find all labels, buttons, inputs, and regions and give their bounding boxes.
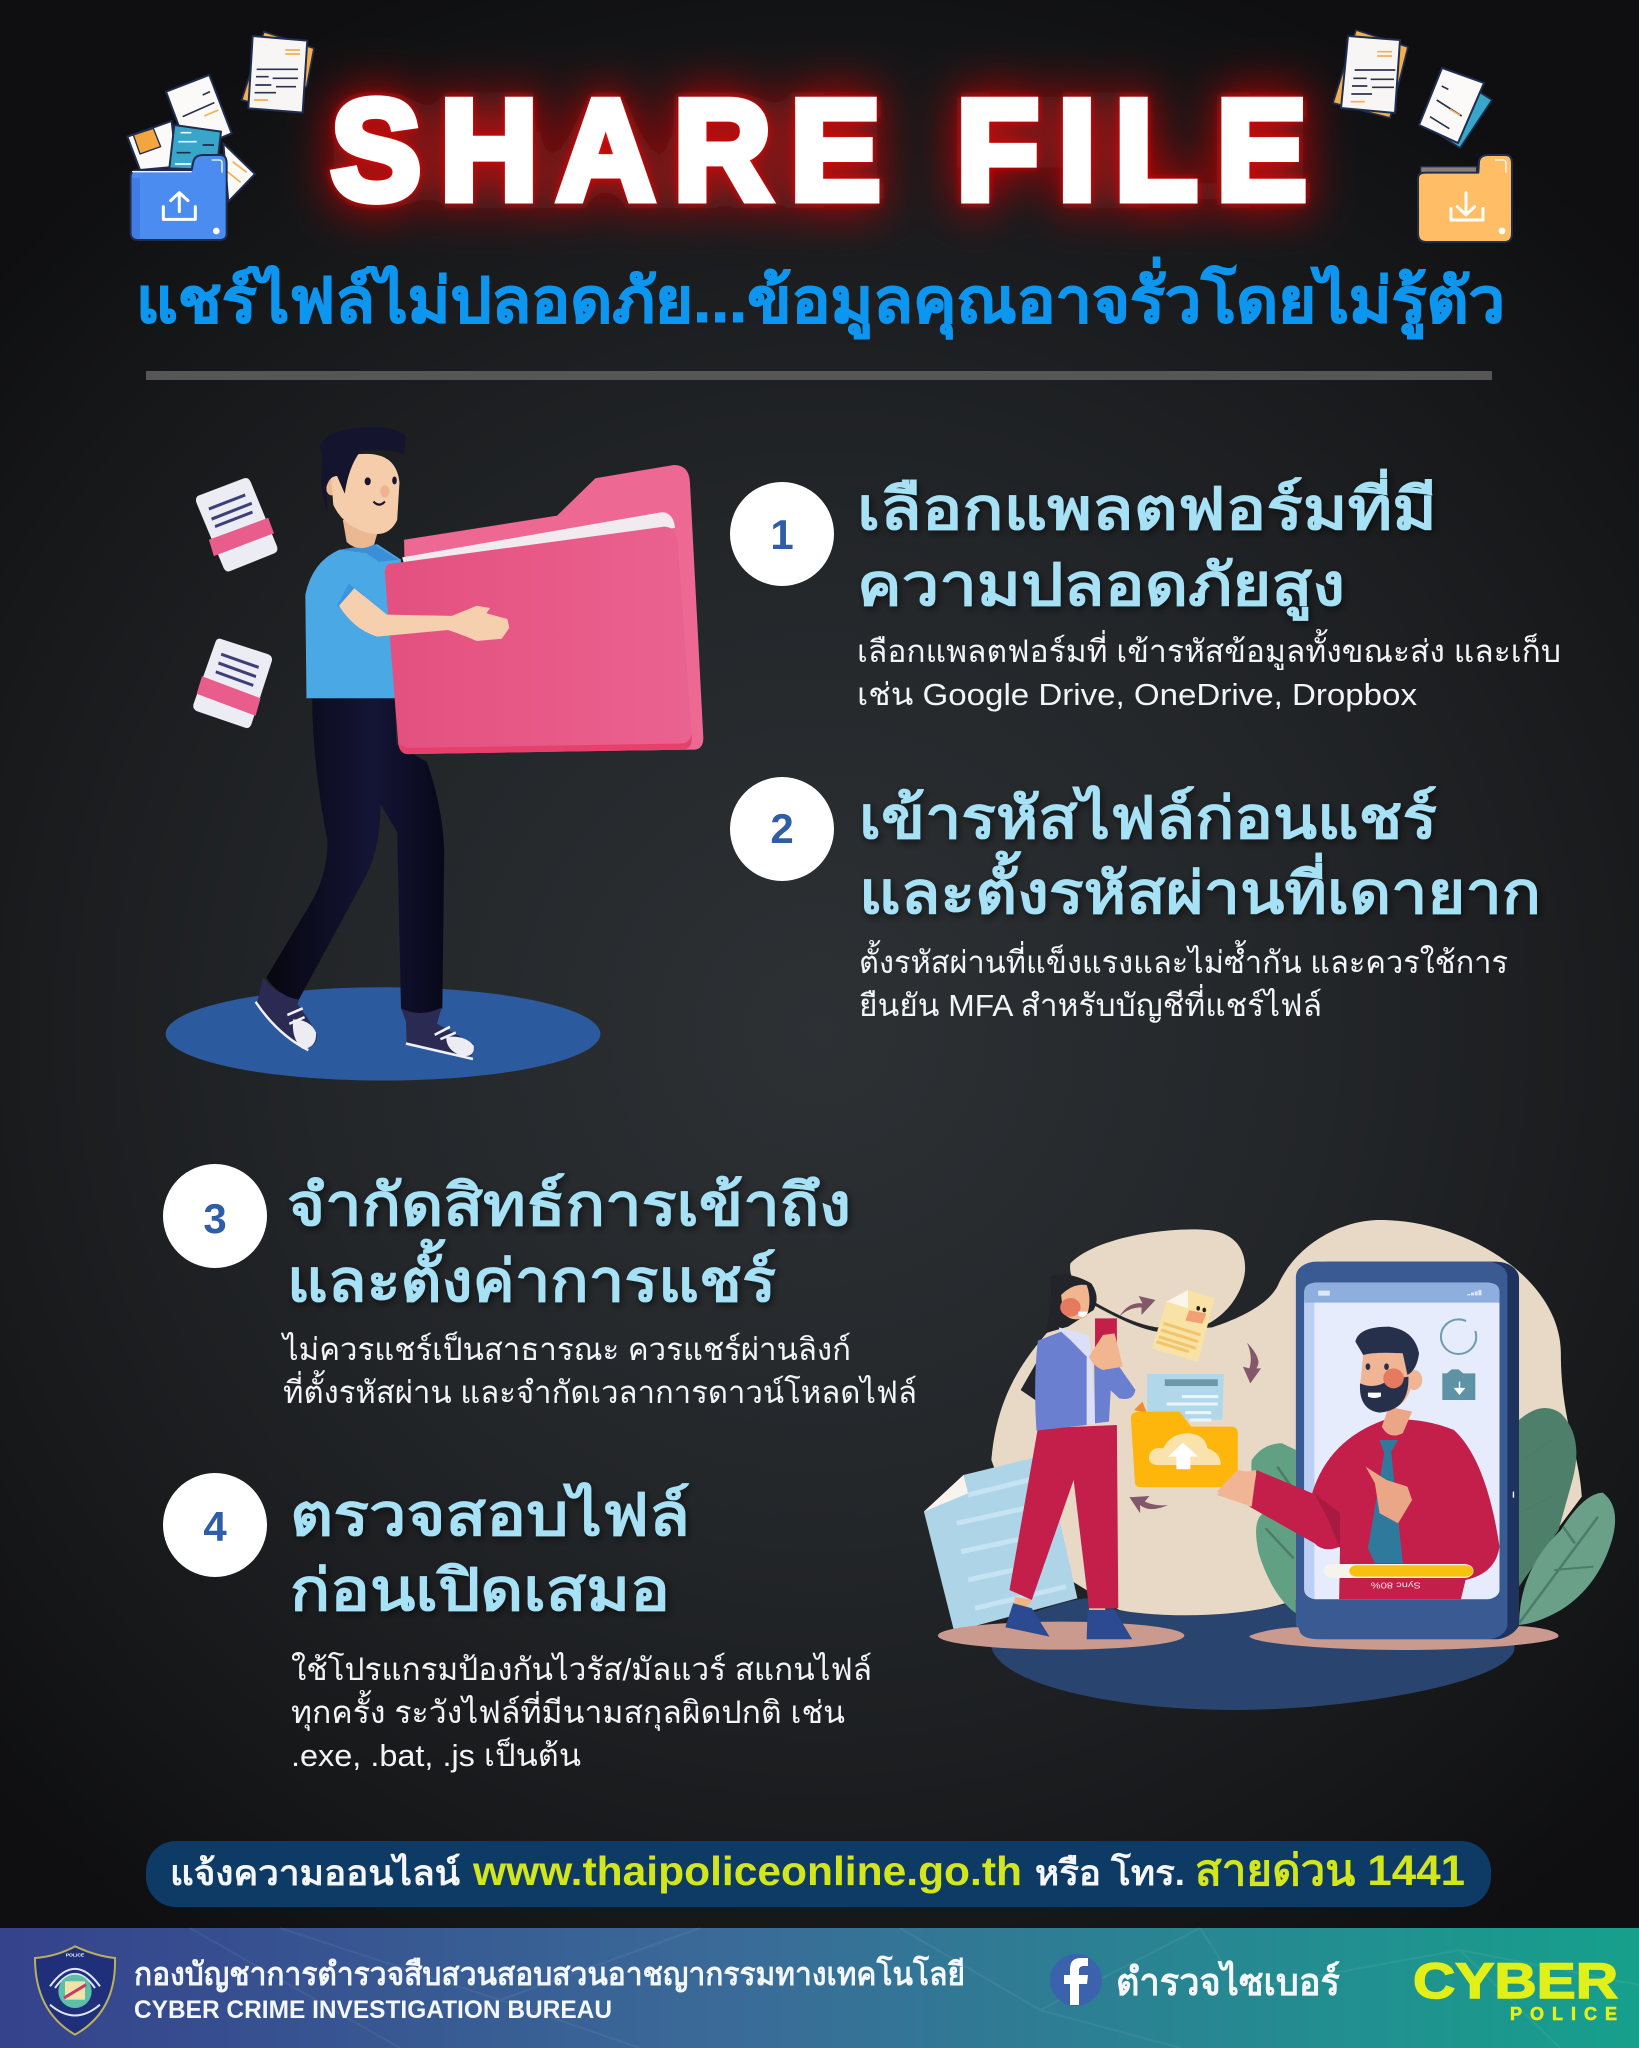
illustration: file sharing between woman and man on phone bbox=[924, 1220, 1615, 1710]
bureau name bbox=[134, 1955, 965, 2024]
folder front panel bbox=[385, 527, 692, 754]
step 3 body: ที่ตั้งรหัสผ่าน และจำกัดเวลาการดาวน์โหลดไฟล์ bbox=[283, 1370, 917, 1410]
floating document 1 bbox=[196, 478, 277, 571]
number badge 4 bbox=[163, 1473, 267, 1577]
floating note bbox=[1152, 1290, 1215, 1362]
sync progress bar bbox=[1324, 1564, 1473, 1589]
hotline text bbox=[170, 1847, 1465, 1895]
step 2 heading: และตั้งรหัสผ่านที่เดายาก bbox=[859, 851, 1541, 926]
pink ground ellipses bbox=[938, 1622, 1559, 1650]
step 1 body bbox=[857, 629, 1561, 712]
facebook page name: ตำรวจไซเบอร์ bbox=[1116, 1960, 1341, 2004]
subtitle: แชร์ไฟล์ไม่ปลอดภัย...ข้อมูลคุณอาจรั่วโดยไม่รู้ตัว bbox=[136, 257, 1505, 339]
blue floor ellipse bbox=[166, 987, 600, 1081]
step 3 body: ไม่ควรแชร์เป็นสาธารณะ ควรแชร์ผ่านลิงก์ bbox=[280, 1331, 851, 1367]
leaves bbox=[1251, 1408, 1615, 1625]
man in phone bbox=[1217, 1327, 1499, 1599]
hotline text: www.thaipoliceonline.go.th bbox=[472, 1848, 1022, 1894]
step 4 body bbox=[291, 1652, 872, 1773]
title: SHARE FILE: SHARE FILE bbox=[331, 72, 1307, 230]
step 1 body: เลือกแพลตฟอร์มที่ เข้ารหัสข้อมูลทั้งขณะส่ง และเก็บ bbox=[857, 629, 1561, 670]
step 3 heading bbox=[287, 1172, 851, 1314]
step 4 bbox=[163, 1473, 872, 1773]
cyber police logo bbox=[1413, 1953, 1618, 2024]
footer band bbox=[0, 1928, 1639, 2048]
title: SHARE FILE: SHARE FILE bbox=[331, 72, 1307, 230]
hotline text: หรือ โทร. bbox=[1035, 1852, 1185, 1893]
man: trousers bbox=[266, 698, 444, 1014]
hotline text: แจ้งความออนไลน์ bbox=[170, 1852, 460, 1893]
folder back bbox=[404, 465, 703, 753]
sync progress bar: Sync 80% bbox=[1370, 1580, 1421, 1589]
number badge 1 bbox=[730, 482, 834, 586]
police badge: POLICE bbox=[66, 1952, 85, 1958]
hotline text: สายด่วน 1441 bbox=[1195, 1847, 1465, 1895]
step 2 body: ตั้งรหัสผ่านที่แข็งแรงและไม่ซ้ำกัน และควรใช้การ bbox=[859, 940, 1508, 980]
number badge 3 bbox=[163, 1164, 267, 1268]
number badge 4: 4 bbox=[203, 1503, 227, 1550]
step 1 heading: เลือกแพลตฟอร์มที่มี bbox=[857, 468, 1437, 542]
floating document 2 bbox=[193, 639, 272, 728]
beige blobs bbox=[991, 1220, 1582, 1617]
number badge 3: 3 bbox=[203, 1195, 227, 1242]
step 3 body bbox=[280, 1331, 917, 1410]
step 2 heading: เข้ารหัสไฟล์ก่อนแชร์ bbox=[859, 785, 1437, 851]
step 4 body: .exe, .bat, .js เป็นต้น bbox=[291, 1737, 581, 1773]
arrows bbox=[1119, 1296, 1261, 1513]
hand holding folder bbox=[1217, 1470, 1256, 1507]
navy floor bbox=[991, 1598, 1514, 1710]
man: neck and head bbox=[320, 427, 406, 548]
number badge 2: 2 bbox=[770, 805, 794, 852]
illustration: man carrying pink folder bbox=[166, 427, 703, 1081]
icon: upload folder with documents bbox=[127, 32, 314, 240]
number badge 1: 1 bbox=[770, 511, 794, 558]
step 4 heading: ตรวจสอบไฟล์ bbox=[290, 1482, 690, 1548]
step 2 heading bbox=[859, 785, 1541, 926]
step 3 heading: จำกัดสิทธ์การเข้าถึง bbox=[287, 1172, 851, 1238]
man: arm and hand bbox=[339, 588, 509, 641]
step 1 heading: ความปลอดภัยสูง bbox=[857, 553, 1345, 621]
bureau name: CYBER CRIME INVESTIGATION BUREAU bbox=[134, 1996, 612, 2024]
number badge 2 bbox=[730, 777, 834, 881]
facebook icon bbox=[1050, 1954, 1102, 2006]
phone bbox=[1296, 1262, 1519, 1639]
woman bbox=[1005, 1274, 1135, 1639]
step 1 heading bbox=[857, 468, 1437, 621]
step 4 heading: ก่อนเปิดเสมอ bbox=[290, 1558, 670, 1623]
bureau name: กองบัญชาการตำรวจสืบสวนสอบสวนอาชญากรรมทางเทคโนโลยี bbox=[134, 1955, 965, 1993]
folder paper bbox=[402, 512, 675, 564]
step 4 body: ใช้โปรแกรมป้องกันไวรัส/มัลแวร์ สแกนไฟล์ bbox=[291, 1652, 872, 1687]
icon: download folder with documents bbox=[1333, 30, 1512, 242]
step 3 bbox=[163, 1164, 917, 1410]
man: shirt bbox=[305, 544, 401, 698]
police badge bbox=[35, 1946, 115, 2035]
step 1 bbox=[730, 468, 1561, 712]
man: shoes bbox=[256, 978, 474, 1059]
step 4 body: ทุกครั้ง ระวังไฟล์ที่มีนามสกุลผิดปกติ เช่น bbox=[291, 1690, 845, 1732]
step 2 bbox=[730, 777, 1541, 1023]
yellow cloud folder bbox=[1131, 1374, 1238, 1487]
step 1 body: เช่น Google Drive, OneDrive, Dropbox bbox=[857, 677, 1418, 712]
step 2 body: ยืนยัน MFA สำหรับบัญชีที่แชร์ไฟล์ bbox=[859, 984, 1322, 1023]
cyber police logo: CYBER bbox=[1413, 1953, 1618, 2009]
hotline pill bbox=[146, 1841, 1491, 1907]
large document bbox=[924, 1455, 1077, 1632]
step 2 body bbox=[859, 940, 1508, 1023]
title: SHARE FILE: SHARE FILE bbox=[331, 72, 1307, 230]
step 3 heading: และตั้งค่าการแชร์ bbox=[287, 1239, 776, 1314]
cyber police logo: POLICE bbox=[1510, 2004, 1617, 2024]
step 4 heading bbox=[290, 1482, 690, 1623]
